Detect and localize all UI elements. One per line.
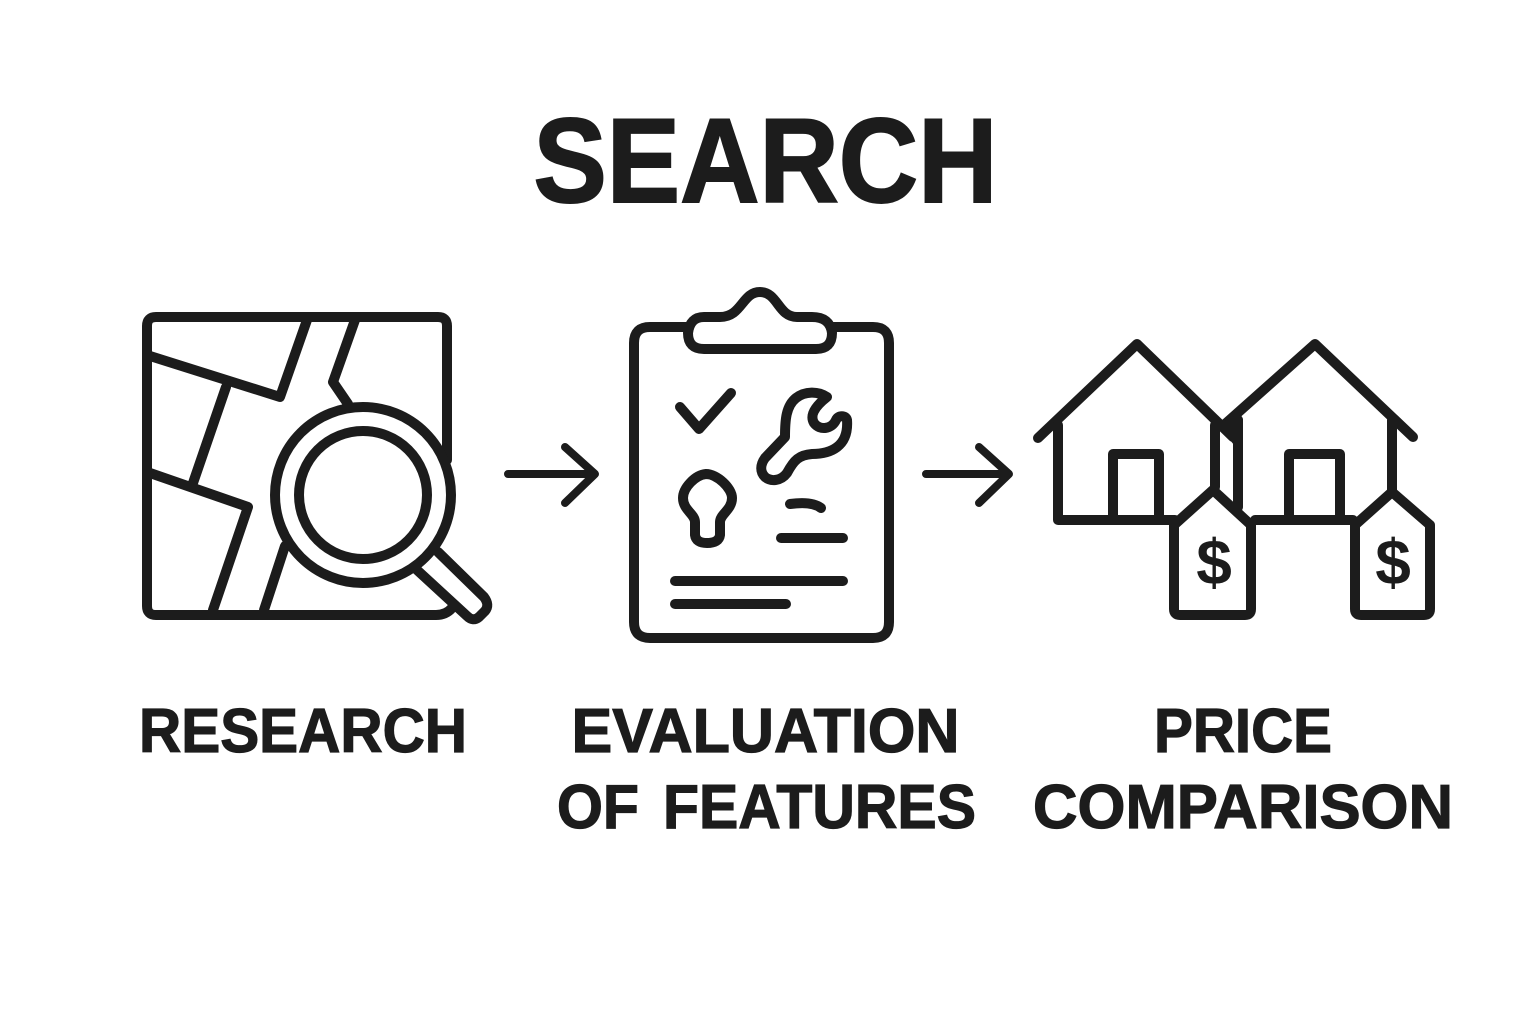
label: price comparison: PRICE [1154, 697, 1332, 766]
label: evaluation of features: FEATURES [663, 773, 976, 842]
icon: map with magnifying glass [147, 317, 487, 619]
title: SEARCH [534, 94, 998, 228]
label: evaluation of features: OF [557, 773, 639, 842]
arrow: evaluation to price comparison [926, 447, 1009, 503]
icon: clipboard checklist [634, 292, 889, 638]
price tag dollar sign right: $ [1375, 526, 1411, 598]
label: research: RESEARCH [139, 697, 467, 766]
label: price comparison [1033, 697, 1453, 842]
label: evaluation of features [557, 697, 976, 842]
arrow: research to evaluation [508, 447, 595, 503]
label: price comparison: COMPARISON [1033, 773, 1453, 842]
price tag dollar sign left: $ [1196, 526, 1232, 598]
label: evaluation of features: EVALUATION [572, 697, 960, 766]
icon: houses with price tags [1038, 344, 1430, 615]
